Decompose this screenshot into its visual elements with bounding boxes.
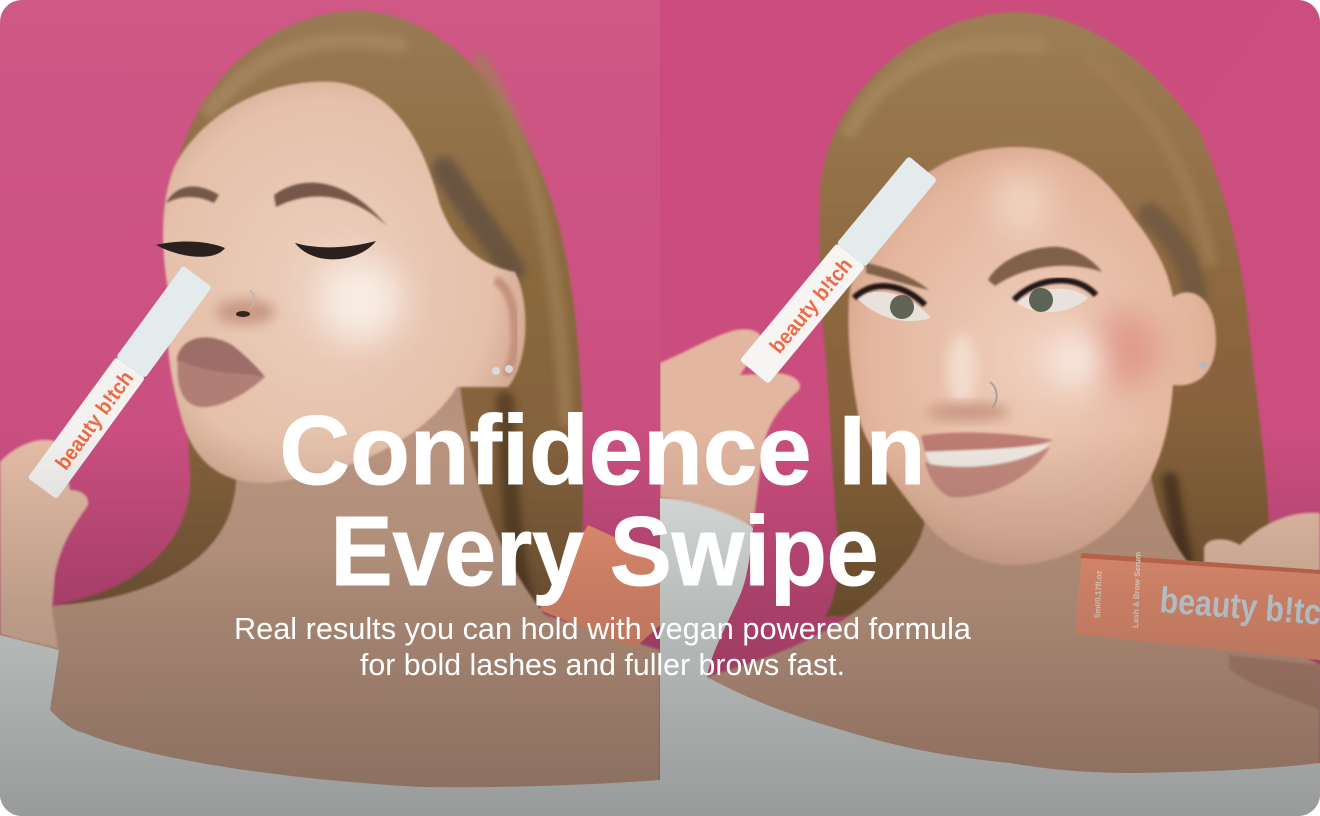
panel: right photo	[660, 0, 1320, 816]
left neck and chest	[0, 385, 660, 800]
right eyes	[854, 280, 1096, 321]
left serum tube	[28, 266, 212, 499]
right product box	[1075, 552, 1320, 660]
left closed eyes	[156, 241, 376, 259]
bottom shade overlay	[0, 430, 1320, 816]
right face	[848, 147, 1216, 565]
right fingers above box	[1204, 513, 1320, 575]
right cheek highlight	[1047, 330, 1103, 390]
title: Confidence In	[280, 395, 926, 505]
right nose	[926, 382, 1010, 421]
subtitle: Real results you can hold with vegan powered formula	[234, 611, 972, 646]
right product box: Lash & Brow Serum	[1131, 552, 1143, 628]
left tube label: beauty b!tch	[51, 367, 138, 474]
left ear shade	[495, 280, 515, 375]
title: Every Swipe	[330, 496, 878, 606]
left sweater	[0, 635, 660, 816]
right brows	[866, 247, 1102, 290]
left product box	[539, 525, 660, 648]
left lips	[177, 337, 265, 407]
left brows	[166, 183, 387, 226]
left earrings	[492, 365, 513, 375]
right hand holding tube	[660, 329, 800, 527]
right earring	[1199, 361, 1207, 369]
left nose	[215, 290, 275, 325]
right cheek blush	[1089, 312, 1161, 388]
box top edge	[1080, 553, 1320, 574]
left cheek highlight	[318, 258, 402, 342]
right lower hand	[1229, 655, 1320, 710]
left hand	[0, 440, 88, 648]
left pink backdrop	[0, 0, 660, 816]
right hair strands	[850, 43, 1210, 560]
right lips	[921, 433, 1053, 497]
right serum tube	[740, 156, 937, 384]
right tube label: beauty b!tch	[766, 254, 857, 358]
right box small print: 5ml/0.17fl.oz	[1093, 570, 1104, 618]
left hair strands	[210, 40, 566, 600]
subtitle	[234, 611, 972, 682]
subtitle: for bold lashes and fuller brows fast.	[360, 647, 845, 682]
right sweater	[660, 498, 1320, 816]
right forehead glow	[992, 173, 1052, 237]
right nose highlight	[948, 334, 976, 406]
panel: left photo	[0, 0, 660, 816]
right hair	[819, 12, 1269, 617]
right neck and chest	[660, 470, 1320, 800]
left hair	[55, 11, 583, 614]
left face	[163, 82, 525, 483]
right pink backdrop	[660, 0, 1320, 816]
title	[280, 395, 926, 606]
